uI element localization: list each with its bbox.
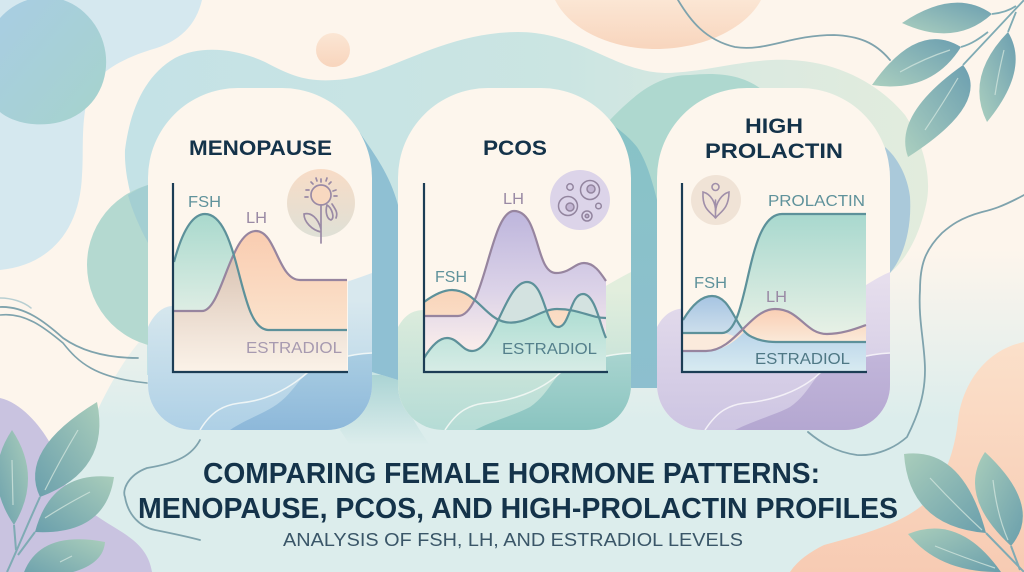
wavy backdrop behind the cards bbox=[87, 32, 928, 388]
icon: wilting sunflower bbox=[287, 169, 355, 243]
icon: sprout figure bbox=[691, 175, 741, 225]
heading: High Prolactin: PROLACTIN bbox=[705, 140, 843, 163]
chart: Menopause hormone curves: ESTRADIOL bbox=[246, 340, 342, 357]
chart: High Prolactin hormone curves: LH bbox=[766, 289, 787, 306]
panel: High Prolactin bbox=[657, 88, 890, 430]
heading: High Prolactin: HIGH bbox=[745, 115, 803, 138]
chart: PCOS hormone curves: LH bbox=[503, 191, 524, 208]
chart: High Prolactin hormone curves: FSH bbox=[694, 275, 727, 292]
heading: Menopause: MENOPAUSE bbox=[189, 137, 332, 160]
subtitle: ANALYSIS OF FSH, LH, AND ESTRADIOL LEVELS bbox=[283, 530, 743, 550]
heading: PCOS: PCOS bbox=[483, 137, 547, 160]
panel: PCOS bbox=[398, 88, 631, 430]
chart: High Prolactin hormone curves: PROLACTIN bbox=[768, 193, 865, 210]
leaf branch: bottom right bbox=[904, 452, 1024, 572]
icon: ovarian follicles bbox=[550, 170, 610, 230]
chart: Menopause hormone curves: FSH bbox=[188, 194, 221, 211]
heading: High Prolactin bbox=[705, 115, 843, 163]
leaf branch: top right bbox=[872, 0, 1024, 157]
chart: Menopause hormone curves: LH bbox=[246, 210, 267, 227]
title: MENOPAUSE, PCOS, AND HIGH-PROLACTIN PROFILES bbox=[138, 493, 898, 525]
chart: Menopause hormone curves bbox=[173, 183, 348, 372]
chart: PCOS hormone curves: ESTRADIOL bbox=[502, 341, 597, 358]
leaf branch: bottom left bbox=[0, 402, 114, 572]
title bbox=[138, 458, 898, 525]
chart: PCOS hormone curves bbox=[424, 183, 608, 372]
chart: High Prolactin hormone curves bbox=[682, 183, 867, 372]
panel: Menopause bbox=[148, 88, 372, 430]
title: COMPARING FEMALE HORMONE PATTERNS: bbox=[203, 458, 820, 490]
chart: High Prolactin hormone curves: ESTRADIOL bbox=[755, 351, 850, 368]
chart: PCOS hormone curves: FSH bbox=[435, 269, 467, 286]
